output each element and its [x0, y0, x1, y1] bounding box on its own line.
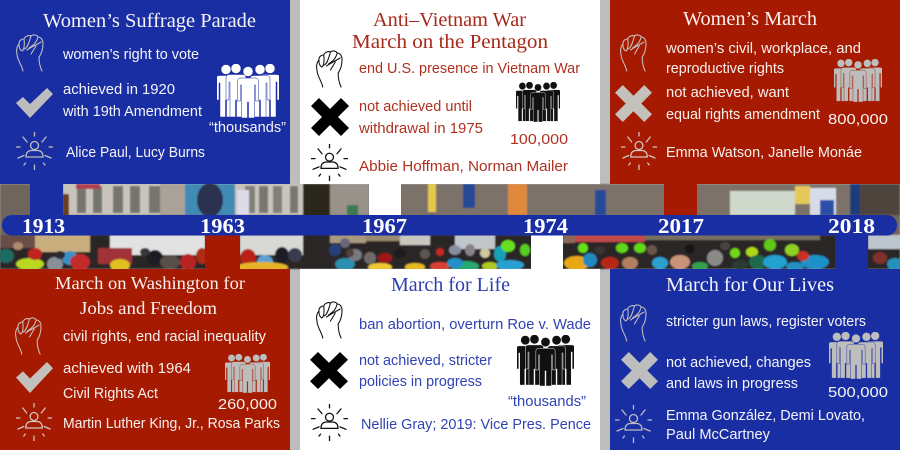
- outcome text: [358, 99, 483, 137]
- icon: leader: [621, 132, 657, 170]
- heading: Women’s Suffrage Parade: [43, 10, 256, 32]
- outcome text: Civil Rights Act: [63, 386, 158, 402]
- icon: check mark: [16, 362, 53, 393]
- goal text: civil rights, end racial inequality: [63, 329, 267, 345]
- icon: fist: [317, 302, 342, 338]
- outcome text: equal rights amendment: [666, 107, 820, 123]
- icon: crowd: [833, 59, 883, 102]
- leaders text: Alice Paul, Lucy Burns: [66, 145, 205, 161]
- year 2017: 2017: [658, 214, 704, 238]
- panel: Anti-Vietnam War March on the Pentagon: [300, 0, 600, 184]
- icon: fist: [317, 51, 342, 87]
- photo band: march crowd: [0, 183, 900, 272]
- attendance: 800,000: [828, 112, 888, 128]
- leaders text: Emma Watson, Janelle Monáe: [666, 145, 862, 161]
- icon: leader: [16, 403, 52, 441]
- icon: fist: [17, 35, 43, 71]
- goal text: reproductive rights: [666, 61, 784, 77]
- panel: March for Our Lives: [610, 269, 900, 450]
- icon: leader: [16, 132, 53, 170]
- heading: March on the Pentagon: [352, 31, 548, 53]
- attendance: 260,000: [218, 397, 277, 413]
- outcome text: not achieved, changes: [666, 355, 811, 371]
- heading: Women’s March: [683, 8, 817, 30]
- year 1967: 1967: [362, 214, 407, 238]
- panel: March for Life: [300, 269, 600, 450]
- icon: fist: [621, 305, 646, 341]
- year 1963: 1963: [200, 214, 245, 238]
- icon: fist: [16, 318, 41, 354]
- attendance: “thousands”: [508, 394, 586, 410]
- goal text: end U.S. presence in Vietnam War: [359, 61, 580, 77]
- leaders text: Abbie Hoffman, Norman Mailer: [359, 159, 568, 175]
- leaders text: Nellie Gray; 2019: Vice Pres. Pence: [361, 417, 591, 433]
- year 2018: 2018: [828, 214, 875, 238]
- heading: [352, 9, 548, 53]
- panel: Women's Suffrage Parade: [0, 0, 290, 184]
- goal text: stricter gun laws, register voters: [666, 314, 866, 330]
- goal text: [665, 41, 861, 77]
- outcome text: [359, 353, 492, 390]
- connector tabs between panels and timeline: [30, 184, 868, 269]
- goal text: women’s right to vote: [62, 47, 199, 63]
- timeline bar: [2, 214, 897, 238]
- heading: March on Washington for: [55, 273, 245, 293]
- outcome text: not achieved until: [359, 99, 472, 115]
- leaders text: Emma González, Demi Lovato,: [666, 408, 865, 424]
- icon: X mark: [615, 85, 652, 122]
- heading: Anti–Vietnam War: [373, 9, 526, 31]
- heading: March for Our Lives: [666, 274, 834, 296]
- icon: leader: [615, 405, 652, 443]
- year 1913: 1913: [22, 214, 65, 238]
- outcome text: and laws in progress: [666, 376, 798, 392]
- goal text: women’s civil, workplace, and: [665, 41, 861, 57]
- outcome text: [666, 85, 820, 123]
- goal text: ban abortion, overturn Roe v. Wade: [359, 317, 591, 333]
- outcome text: policies in progress: [359, 374, 482, 390]
- outcome text: [666, 355, 811, 392]
- icon: fist: [621, 35, 646, 71]
- heading: March for Life: [391, 274, 510, 296]
- leaders text: Martin Luther King, Jr., Rosa Parks: [63, 416, 280, 432]
- leaders text: Paul McCartney: [666, 427, 771, 443]
- icon: crowd: [515, 82, 561, 122]
- panel: Women's March: [610, 0, 900, 184]
- icon: crowd: [516, 335, 575, 386]
- panel: March on Washington for Jobs and Freedom: [0, 269, 290, 450]
- icon: X mark: [311, 98, 349, 136]
- outcome text: not achieved, stricter: [359, 353, 492, 369]
- outcome text: with 19th Amendment: [62, 104, 202, 120]
- attendance: 500,000: [828, 385, 888, 401]
- icon: crowd: [216, 64, 280, 118]
- heading: Jobs and Freedom: [80, 298, 217, 318]
- outcome text: withdrawal in 1975: [358, 121, 483, 137]
- heading: [55, 273, 245, 318]
- outcome text: achieved in 1920: [63, 82, 175, 98]
- icon: X mark: [310, 352, 348, 389]
- year 1974: 1974: [523, 214, 569, 238]
- attendance: 100,000: [510, 132, 568, 148]
- attendance: “thousands”: [209, 120, 286, 136]
- outcome text: [63, 361, 191, 402]
- icon: check mark: [16, 88, 53, 118]
- leaders text: [666, 408, 865, 443]
- icon: crowd: [224, 354, 271, 393]
- outcome text: achieved with 1964: [63, 361, 191, 377]
- outcome text: not achieved, want: [666, 85, 789, 101]
- icon: X mark: [621, 352, 658, 389]
- outcome text: [62, 82, 202, 120]
- icon: crowd: [828, 332, 884, 379]
- icon: leader: [311, 404, 348, 441]
- icon: leader: [311, 144, 348, 181]
